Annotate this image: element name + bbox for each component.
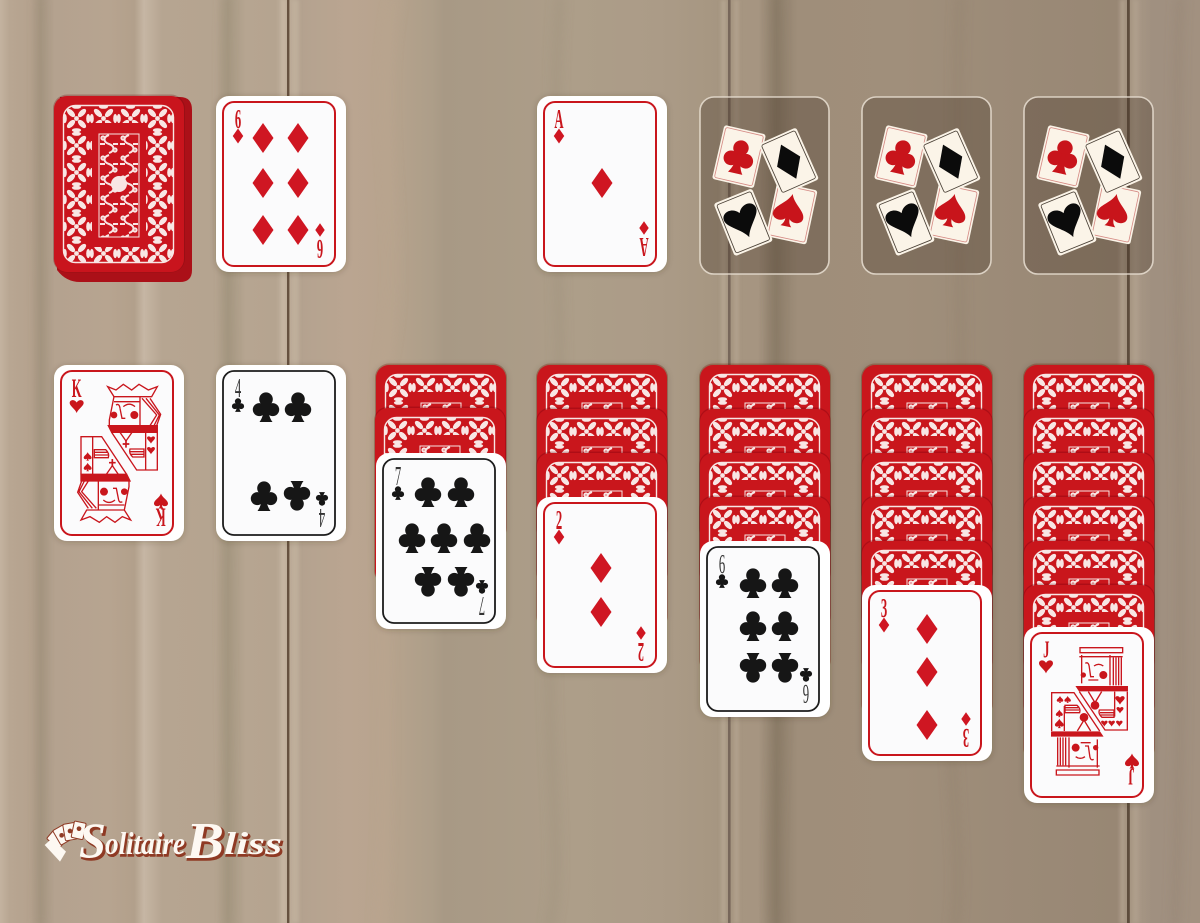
logo: Solitaire Bliss: liss: [226, 827, 284, 863]
tableau 1: king of hearts: K: [155, 502, 166, 533]
tableau 7: six backs and jack of hearts: [1023, 364, 1155, 803]
logo: Solitaire Bliss: S: [81, 814, 108, 870]
icon: fan of cards: [45, 821, 86, 862]
tableau 1: king of hearts: [54, 365, 184, 541]
logo: Solitaire Bliss: B: [185, 813, 224, 870]
logo: Solitaire Bliss: S: [79, 812, 106, 868]
logo: Solitaire Bliss: olitaire: [106, 827, 186, 863]
tableau 6: five backs and three of diamonds: 3: [963, 723, 969, 753]
tableau 4: three backs and two of diamonds: 2: [638, 637, 644, 667]
tableau 2: four of clubs: 4: [319, 503, 325, 533]
foundation: ace of diamonds: A: [554, 104, 564, 134]
tableau 7: six backs and jack of hearts: J: [1128, 762, 1134, 789]
tableau 3: two backs and seven of clubs: 7: [395, 461, 401, 491]
tableau 1: king of hearts: K: [72, 373, 82, 403]
foundation slot 3: [1024, 97, 1153, 274]
tableau 2: four of clubs: 4: [235, 373, 241, 403]
tableau 3: two backs and seven of clubs: [374, 364, 507, 629]
tableau 2: four of clubs: [216, 365, 346, 541]
tableau 7: six backs and jack of hearts: J: [1043, 637, 1050, 664]
tableau 6: five backs and three of diamonds: 3: [881, 593, 887, 623]
tableau 6: five backs and three of diamonds: [861, 364, 993, 761]
tableau 5: four backs and six of clubs: [699, 364, 831, 717]
logo: Solitaire Bliss: olitaire: [105, 825, 185, 861]
stock pile: [53, 94, 192, 282]
tableau 4: three backs and two of diamonds: [536, 364, 668, 673]
foundation: ace of diamonds: A: [639, 232, 649, 262]
foundation slot 2: [862, 97, 991, 274]
tableau 4: three backs and two of diamonds: 2: [556, 505, 562, 535]
logo: Solitaire Bliss: liss: [224, 825, 282, 861]
logo: Solitaire Bliss: [45, 812, 284, 872]
waste card: six of diamonds: 6: [317, 234, 323, 264]
tableau 3: two backs and seven of clubs: 7: [479, 591, 485, 621]
logo: Solitaire Bliss: B: [187, 815, 226, 872]
tableau 5: four backs and six of clubs: 6: [719, 549, 725, 579]
tableau 5: four backs and six of clubs: 6: [803, 679, 809, 709]
foundation slot 1: [700, 97, 829, 274]
waste card: six of diamonds: [216, 96, 346, 272]
waste card: six of diamonds: 6: [235, 104, 241, 134]
foundation: ace of diamonds: [537, 96, 667, 272]
